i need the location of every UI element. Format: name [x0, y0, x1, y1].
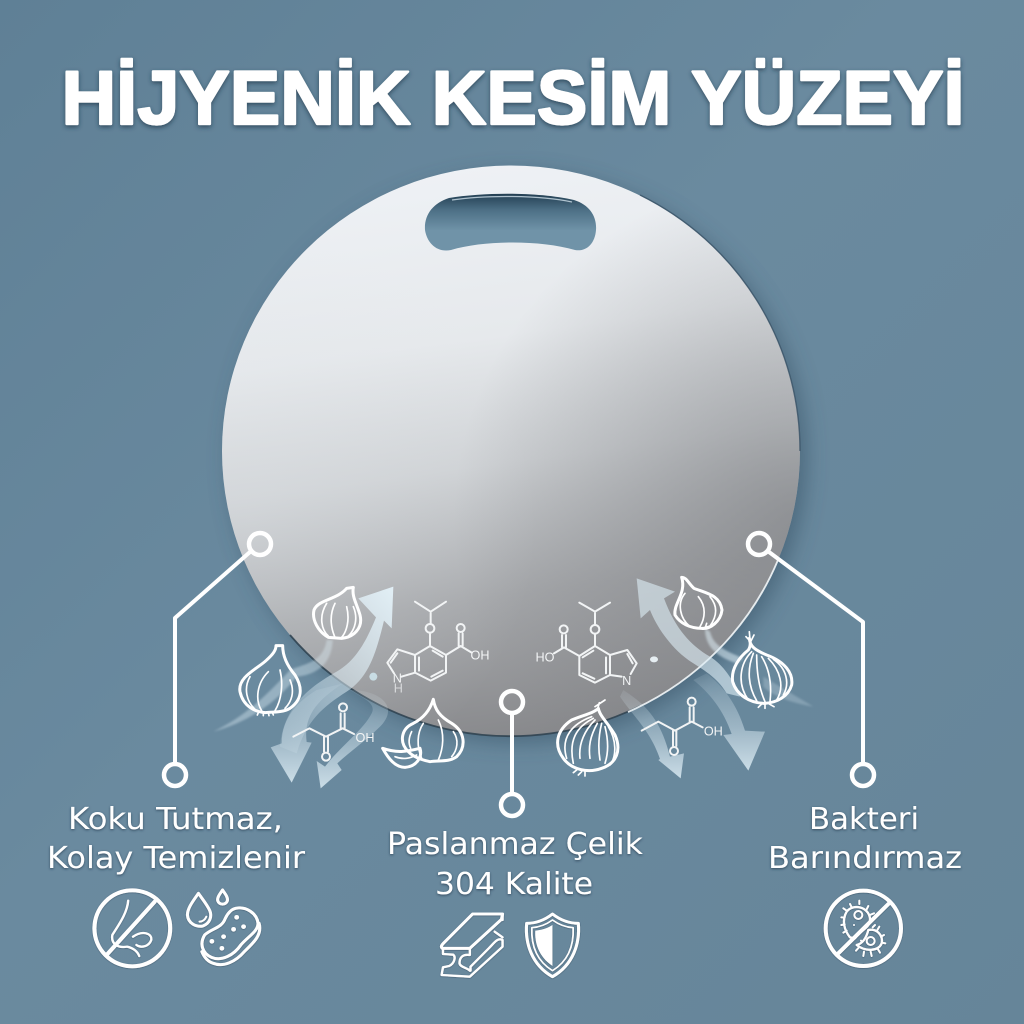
title: HİJYENİK KESİM YÜZEYİ: [62, 56, 964, 141]
vapour arrows up: [213, 587, 393, 753]
onion outline: right: [732, 632, 792, 708]
bacteria cell lower: [857, 930, 882, 950]
odor illustration: left: [213, 587, 489, 788]
indole carboxylic molecule: left: H: [394, 682, 403, 696]
vapour arrows down: [620, 673, 813, 778]
icon: no odor nose: [94, 890, 170, 966]
connector: centre: [501, 691, 523, 816]
connector: left: [164, 533, 271, 786]
connector: right: [748, 533, 874, 786]
garlic with clove: [383, 699, 463, 767]
garlic outline: upper right: [675, 577, 722, 628]
label: no bacteria: Barındırmaz: [768, 841, 962, 876]
bacteria cell upper: [844, 907, 870, 938]
stainless steel round cutting board: [222, 166, 806, 742]
keto acid molecule: left: OH: [356, 731, 374, 745]
indole carboxylic molecule: right: [536, 603, 637, 688]
icon: shield: [526, 914, 579, 977]
label: no bacteria: [768, 802, 962, 876]
vapour arrow up: [637, 578, 743, 697]
indole carboxylic molecule: right: HO: [536, 650, 555, 664]
indole carboxylic molecule: left: OH: [471, 648, 489, 662]
keto acid molecule: left: [293, 703, 374, 761]
handle slot: [425, 194, 596, 251]
icon: steel I-beam: [441, 914, 503, 977]
light rim on lower right of board: [628, 560, 778, 712]
label: odor / easy clean: [47, 802, 306, 876]
label: stainless steel: Paslanmaz Çelik: [387, 827, 644, 862]
indole carboxylic molecule: left: [387, 602, 489, 696]
label: no bacteria: Bakteri: [809, 802, 919, 837]
onion outline: bottom: [558, 700, 618, 776]
keto acid molecule: right: OH: [704, 725, 723, 739]
keto acid molecule: right: [642, 698, 723, 755]
icon: water drops: [187, 890, 227, 926]
label: odor / easy clean: Kolay Temizlenir: [47, 841, 306, 876]
garlic outline: top: [314, 587, 361, 638]
label: stainless steel: 304 Kalite: [435, 867, 593, 902]
indole carboxylic molecule: left: N: [393, 672, 402, 686]
odor illustration: right: [536, 577, 813, 778]
icon group: [94, 890, 579, 977]
icon: sponge: [202, 908, 260, 965]
particle dot: [650, 656, 658, 662]
label: stainless steel: [387, 827, 644, 902]
icon: no bacteria: [826, 891, 901, 966]
garlic outline: left: [240, 646, 300, 716]
vapour arrows down: [271, 683, 388, 788]
particle dot: [369, 673, 377, 681]
indole carboxylic molecule: right: N: [622, 674, 631, 688]
label: odor / easy clean: Koku Tutmaz,: [68, 802, 283, 837]
